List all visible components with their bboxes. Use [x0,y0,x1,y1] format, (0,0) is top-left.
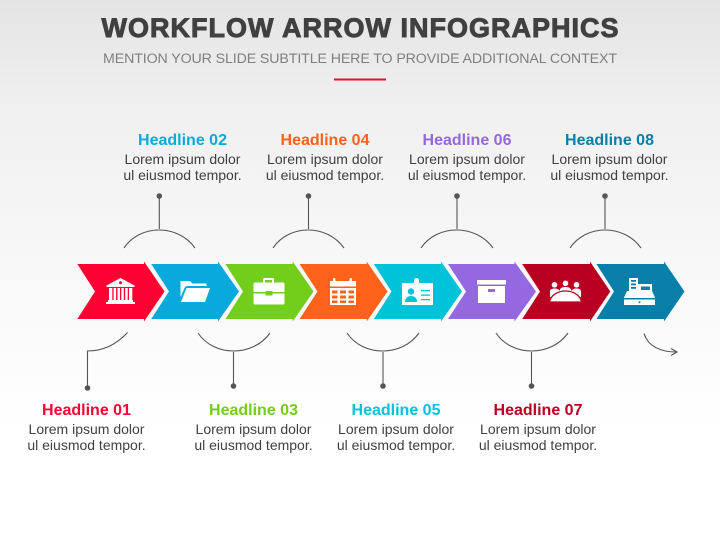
text block: headline 03: Headline 03 [209,402,298,419]
text block: headline 03: Lorem ipsum dolor [196,421,312,437]
text block: headline 06: ul eiusmod tempor. [408,167,526,183]
text block: headline 02 [123,132,242,183]
text block: headline 03: ul eiusmod tempor. [194,437,313,453]
text block: headline 05: Headline 05 [352,402,441,419]
text block: headline 08: ul eiusmod tempor. [550,167,669,183]
arrow 4: calendar [300,262,388,322]
connector: headline 04 [273,193,344,248]
arrow 1: bank [77,262,164,322]
text block: headline 04: Lorem ipsum dolor [267,151,383,167]
text block: headline 08: Lorem ipsum dolor [552,151,668,167]
icon: archive box [477,280,506,303]
text block: headline 08: Headline 08 [565,132,654,149]
text block: headline 07 [479,402,597,453]
arrow 6: archive box [448,262,536,322]
text block: headline 06: Headline 06 [423,132,512,149]
text block: headline 01: Headline 01 [42,402,131,419]
text block: headline 07: Headline 07 [494,402,583,419]
arrow 8: cash register [596,262,684,322]
text block: headline 04: ul eiusmod tempor. [266,167,384,183]
icon: id badge [402,278,433,305]
text block: headline 07: Lorem ipsum dolor [480,421,596,437]
text block: headline 05 [337,402,455,453]
text block: headline 01: ul eiusmod tempor. [27,437,146,453]
text block: headline 08 [550,132,669,183]
icon: bank building [106,278,135,304]
connector: headline 07 [496,333,568,389]
text block: headline 06 [408,132,526,183]
connector: headline 02 [124,193,195,248]
connector: headline 05 [347,333,419,389]
arrow 7: meeting [522,262,610,322]
text block: headline 02: Lorem ipsum dolor [125,151,241,167]
icon: team meeting [550,280,582,302]
connector: headline 01 [85,332,128,391]
text block: headline 01 [27,402,146,453]
arrow: end of flow [644,334,677,356]
text block: headline 03 [194,402,313,453]
connector: headline 08 [570,193,641,248]
icon: briefcase [254,278,284,304]
text block: headline 02: Headline 02 [138,132,227,149]
text block: headline 05: Lorem ipsum dolor [338,421,454,437]
title: WORKFLOW ARROW INFOGRAPHICS [102,13,618,43]
arrow 2: folder [151,262,239,322]
subtitle: MENTION YOUR SLIDE SUBTITLE HERE TO PROVIDE ADDITIONAL CONTEXT [103,51,617,67]
connector: headline 06 [421,193,493,248]
title underline [334,78,386,80]
connector: headline 03 [198,333,270,389]
arrow 5: id card [374,262,462,322]
text block: headline 05: ul eiusmod tempor. [337,437,455,453]
icon: cash register [624,278,655,305]
icon: open folder [180,281,210,302]
text block: headline 07: ul eiusmod tempor. [479,437,597,453]
icon: calendar [330,278,356,305]
text block: headline 04 [266,132,384,183]
text block: headline 02: ul eiusmod tempor. [123,167,242,183]
text block: headline 04: Headline 04 [281,132,370,149]
arrow 3: briefcase [225,262,314,322]
text block: headline 01: Lorem ipsum dolor [29,421,145,437]
text block: headline 06: Lorem ipsum dolor [409,151,525,167]
